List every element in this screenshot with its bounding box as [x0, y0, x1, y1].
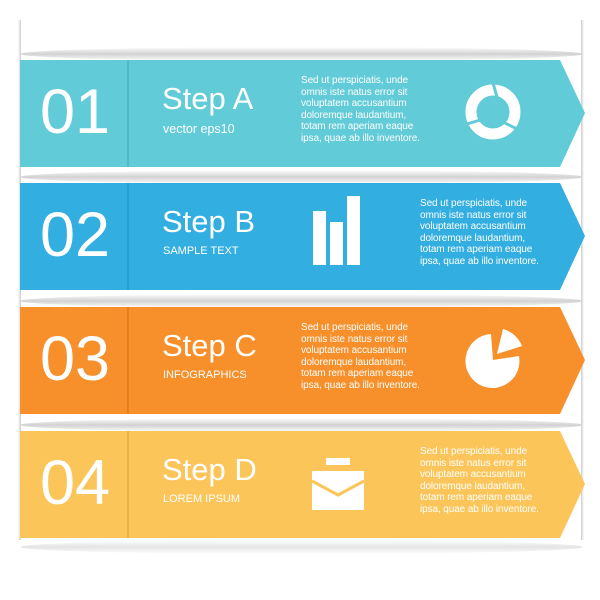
text block	[301, 322, 420, 390]
text block: totam rem aperiam eaque	[420, 492, 532, 503]
panel: step B	[20, 183, 585, 290]
subtitle: INFOGRAPHICS	[163, 369, 247, 381]
icon: cycle arrows	[466, 84, 520, 140]
panel: step C	[20, 307, 585, 414]
subtitle: SAMPLE TEXT	[163, 245, 239, 257]
text block: voluptatem accusantium	[301, 345, 407, 356]
text block: omnis iste natus error sit	[301, 334, 407, 344]
text block: voluptatem accusantium	[420, 221, 526, 232]
number 03: 03	[40, 324, 110, 394]
heading: Step B: Step B	[162, 204, 255, 239]
text block: omnis iste natus error sit	[420, 210, 526, 220]
number 01: 01	[40, 77, 110, 147]
text block: ipsa, quae ab illo inventore.	[420, 256, 539, 266]
text block: totam rem aperiam eaque	[301, 121, 413, 132]
text block: omnis iste natus error sit	[301, 86, 407, 98]
subtitle: vector eps10	[163, 122, 235, 136]
text block: Sed ut perspiciatis, unde	[301, 322, 408, 333]
text block: Sed ut perspiciatis, unde	[420, 198, 527, 209]
panel: step A	[20, 60, 585, 167]
text block	[301, 75, 420, 144]
text block	[420, 198, 539, 266]
text block: Sed ut perspiciatis, unde	[420, 446, 527, 457]
number 02: 02	[40, 200, 110, 270]
text block: totam rem aperiam eaque	[420, 244, 532, 255]
icon: briefcase	[312, 458, 364, 510]
icon: bar chart	[313, 196, 360, 265]
text block: doloremque laudantium,	[301, 356, 406, 368]
text block: omnis iste natus error sit	[420, 458, 526, 468]
text block: voluptatem accusantium	[420, 469, 526, 480]
text block	[420, 446, 539, 514]
text block: ipsa, quae ab illo inventore.	[301, 132, 420, 144]
text block: ipsa, quae ab illo inventore.	[301, 380, 420, 390]
text block: Sed ut perspiciatis, unde	[301, 75, 408, 86]
icon: pie chart	[465, 329, 522, 388]
panel: step D	[20, 431, 585, 538]
heading: Step D: Step D	[162, 452, 257, 487]
text block: doloremque laudantium,	[301, 110, 406, 120]
text block: doloremque laudantium,	[420, 232, 525, 244]
number 04: 04	[40, 448, 110, 518]
text block: voluptatem accusantium	[301, 98, 407, 109]
text block: doloremque laudantium,	[420, 480, 525, 492]
text block: ipsa, quae ab illo inventore.	[420, 504, 539, 514]
heading: Step A: Step A	[162, 81, 253, 116]
text block: totam rem aperiam eaque	[301, 368, 413, 379]
heading: Step C: Step C	[162, 328, 257, 363]
subtitle: LOREM IPSUM	[163, 493, 240, 505]
